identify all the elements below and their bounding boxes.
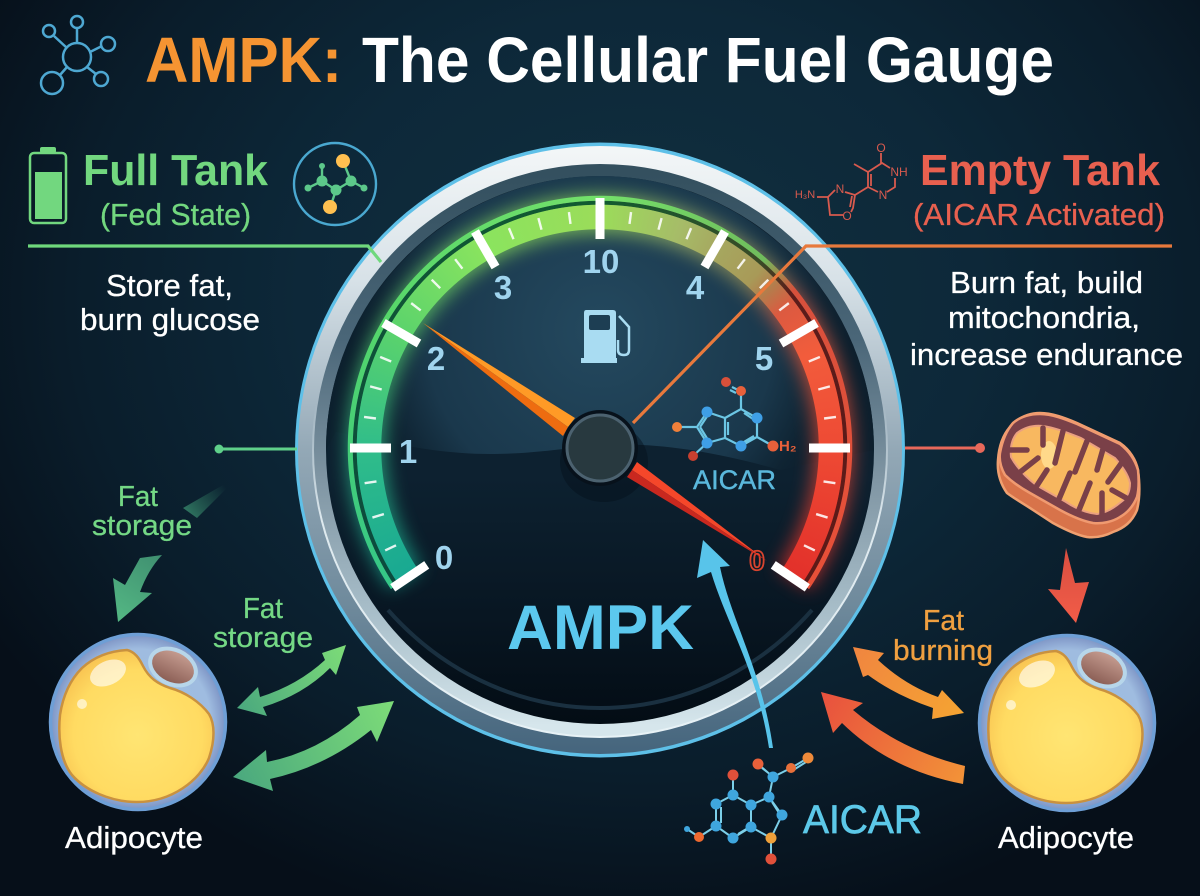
empty tank description: mitochondria, (948, 300, 1140, 335)
icon: red molecule structure: H₃N (795, 189, 815, 201)
icon: circled molecule (294, 143, 376, 225)
icon: fuel pump (581, 310, 629, 363)
fuel arc: green to red (334, 182, 866, 598)
empty tank description: Burn fat, build (950, 265, 1143, 300)
gauge numerals: 1 (399, 433, 417, 470)
icon: red molecule structure: N (836, 182, 844, 196)
full tank description: burn glucose (80, 302, 260, 337)
label: fat storage lower: storage (213, 622, 313, 654)
left connector (214, 444, 297, 454)
molecule: AICAR in gauge (672, 377, 796, 495)
gauge numerals (399, 243, 773, 576)
needle hub (562, 410, 638, 486)
icon: red molecule structure: O (842, 209, 852, 223)
full tank heading: Full Tank (83, 146, 269, 195)
empty tank description (910, 265, 1183, 372)
icon: red molecule structure: N (879, 188, 887, 202)
label: fat burning: burning (893, 635, 993, 667)
panel: full tank (28, 143, 381, 337)
icon: red molecule structure (795, 141, 908, 223)
full tank rule (28, 246, 381, 262)
gauge (295, 142, 1172, 758)
arrow: green double 2 (233, 701, 394, 791)
label: AICAR bottom: AICAR (803, 798, 922, 842)
label: fat storage lower (213, 593, 313, 654)
gauge numerals: 0 (435, 539, 453, 576)
needle: orange full-tank position (423, 323, 575, 436)
right connector (905, 443, 985, 453)
adipocyte left (50, 634, 226, 810)
hub shadow (560, 422, 648, 502)
panel: empty tank (795, 141, 1183, 372)
empty tank description: increase endurance (910, 337, 1183, 372)
arrow: fat storage down (113, 555, 162, 622)
label: fat storage upper (92, 481, 192, 542)
fed state subheading: (Fed State) (100, 197, 251, 232)
molecule: AICAR in gauge: H₂ (779, 438, 796, 455)
label: adipocyte left: Adipocyte (65, 820, 203, 855)
icon: battery (30, 147, 66, 223)
label: fat storage lower: Fat (243, 593, 283, 625)
gauge numerals: 10 (583, 243, 619, 280)
full tank description: Store fat, (106, 268, 233, 303)
needle: red empty-tank position (627, 462, 767, 561)
arrow: orange double (853, 647, 964, 719)
full tank description (80, 268, 260, 337)
aicar activated subheading: (AICAR Activated) (913, 197, 1165, 232)
molecule: AICAR in gauge: AICAR (693, 465, 776, 495)
gauge bezel (295, 142, 905, 758)
gauge face (326, 176, 874, 724)
label: fat storage upper: Fat (118, 481, 158, 513)
gauge numerals: 4 (686, 269, 705, 306)
label: fat burning: Fat (923, 605, 964, 637)
arrow: red to orange (821, 692, 965, 784)
label: fat burning (893, 605, 993, 667)
faded green arrow stub (183, 485, 227, 518)
empty tank heading: Empty Tank (920, 146, 1161, 195)
minor ticks (364, 212, 836, 552)
red zero label: 0 (749, 545, 765, 576)
gauge numerals: 3 (494, 269, 512, 306)
gauge numerals: 5 (755, 340, 773, 377)
adipocyte right (980, 636, 1154, 810)
AMPK gauge label: AMPK (507, 593, 694, 663)
orange connector line to empty tank (633, 246, 1172, 423)
title remainder: The Cellular Fuel Gauge (362, 24, 1054, 96)
title text: AMPK: (145, 24, 342, 96)
label: adipocyte right: Adipocyte (998, 820, 1134, 855)
major ticks (350, 198, 850, 592)
icon: molecule network (41, 16, 115, 94)
gauge numerals: 2 (427, 340, 445, 377)
icon: red molecule structure: O (876, 141, 886, 155)
label: fat storage upper: storage (92, 510, 192, 542)
mitochondrion (998, 413, 1139, 537)
arrow: AICAR to gauge (697, 540, 773, 748)
title (41, 16, 342, 96)
molecule: AICAR bottom (684, 752, 814, 864)
icon: red molecule structure: NH (890, 165, 908, 179)
arrow: mitochondrion to adipocyte (1048, 548, 1089, 623)
arrow: green double 1 (237, 645, 346, 716)
